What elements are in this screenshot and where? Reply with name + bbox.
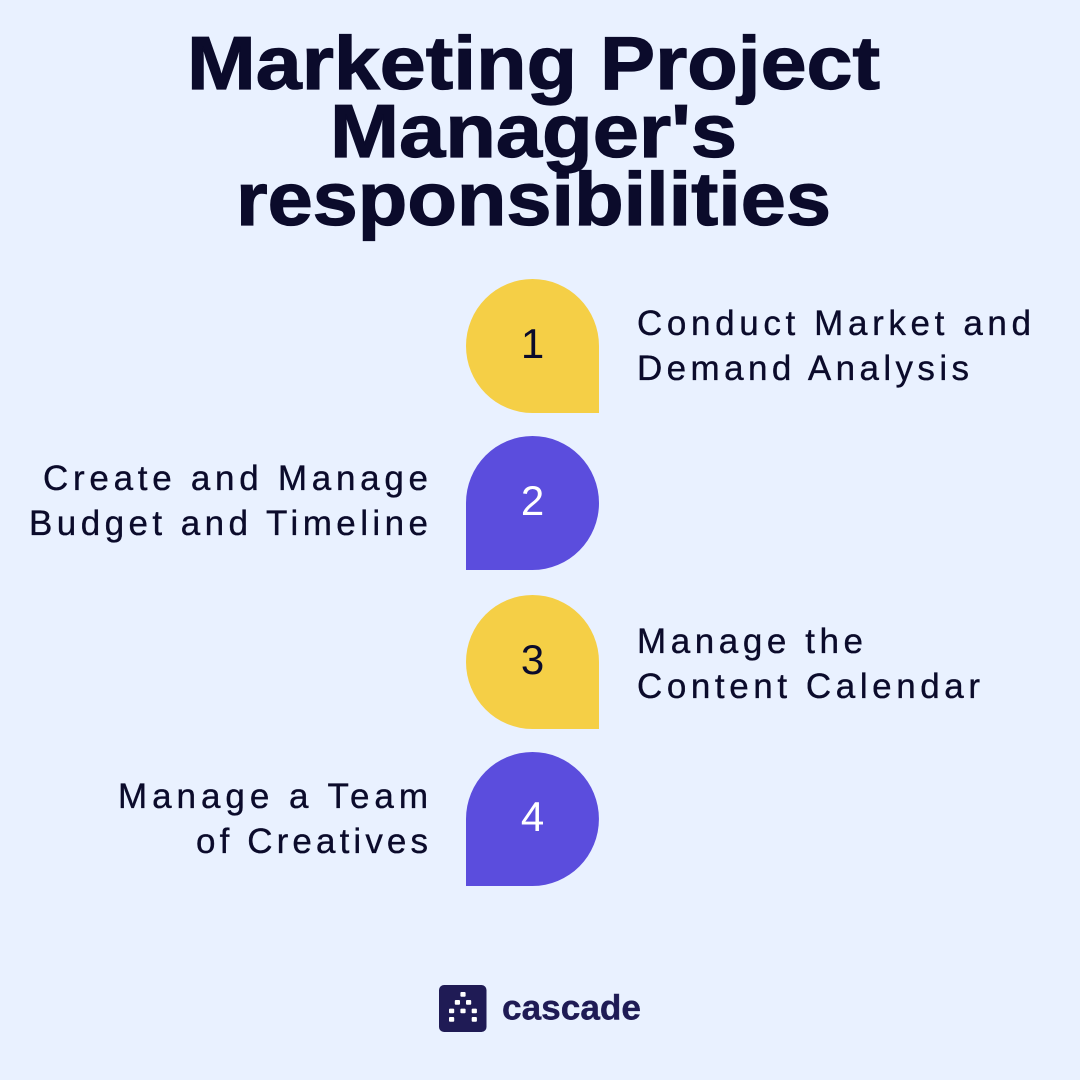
title: responsibilities bbox=[236, 157, 831, 241]
step 3 badge: 3 bbox=[521, 636, 544, 683]
step 3 badge bbox=[466, 595, 599, 729]
step 4 badge bbox=[466, 752, 599, 886]
cascade logo bbox=[439, 985, 641, 1032]
step 1 badge: 1 bbox=[521, 320, 544, 367]
step 2 text: Create and Manage bbox=[43, 459, 428, 498]
step 3 text bbox=[637, 622, 980, 706]
step 4: Manage a Team of Creatives bbox=[118, 752, 599, 886]
title: Marketing Project bbox=[187, 21, 880, 105]
step 1 text: Conduct Market and bbox=[637, 304, 1031, 343]
step 4 text bbox=[118, 777, 428, 861]
wordmark: cascade bbox=[502, 988, 641, 1028]
step 1 badge bbox=[466, 279, 599, 413]
step 2 badge bbox=[466, 436, 599, 570]
step 4 text: of Creatives bbox=[196, 822, 428, 861]
title: Manager's bbox=[330, 89, 737, 173]
step 3 text: Manage the bbox=[637, 622, 863, 661]
step 2 text bbox=[29, 459, 428, 543]
step 4 text: Manage a Team bbox=[118, 777, 428, 816]
step 2 badge: 2 bbox=[521, 477, 544, 524]
title bbox=[187, 21, 880, 241]
step 3: Manage the Content Calendar bbox=[466, 595, 980, 729]
step 1 text: Demand Analysis bbox=[637, 349, 969, 388]
step 4 badge: 4 bbox=[521, 793, 544, 840]
step 1 text bbox=[637, 304, 1031, 388]
step 3 text: Content Calendar bbox=[637, 667, 980, 706]
step 1: Conduct Market and Demand Analysis bbox=[466, 279, 1031, 413]
step 2: Create and Manage Budget and Timeline bbox=[29, 436, 599, 570]
icon: cascade mark bbox=[439, 985, 486, 1032]
step 2 text: Budget and Timeline bbox=[29, 504, 428, 543]
